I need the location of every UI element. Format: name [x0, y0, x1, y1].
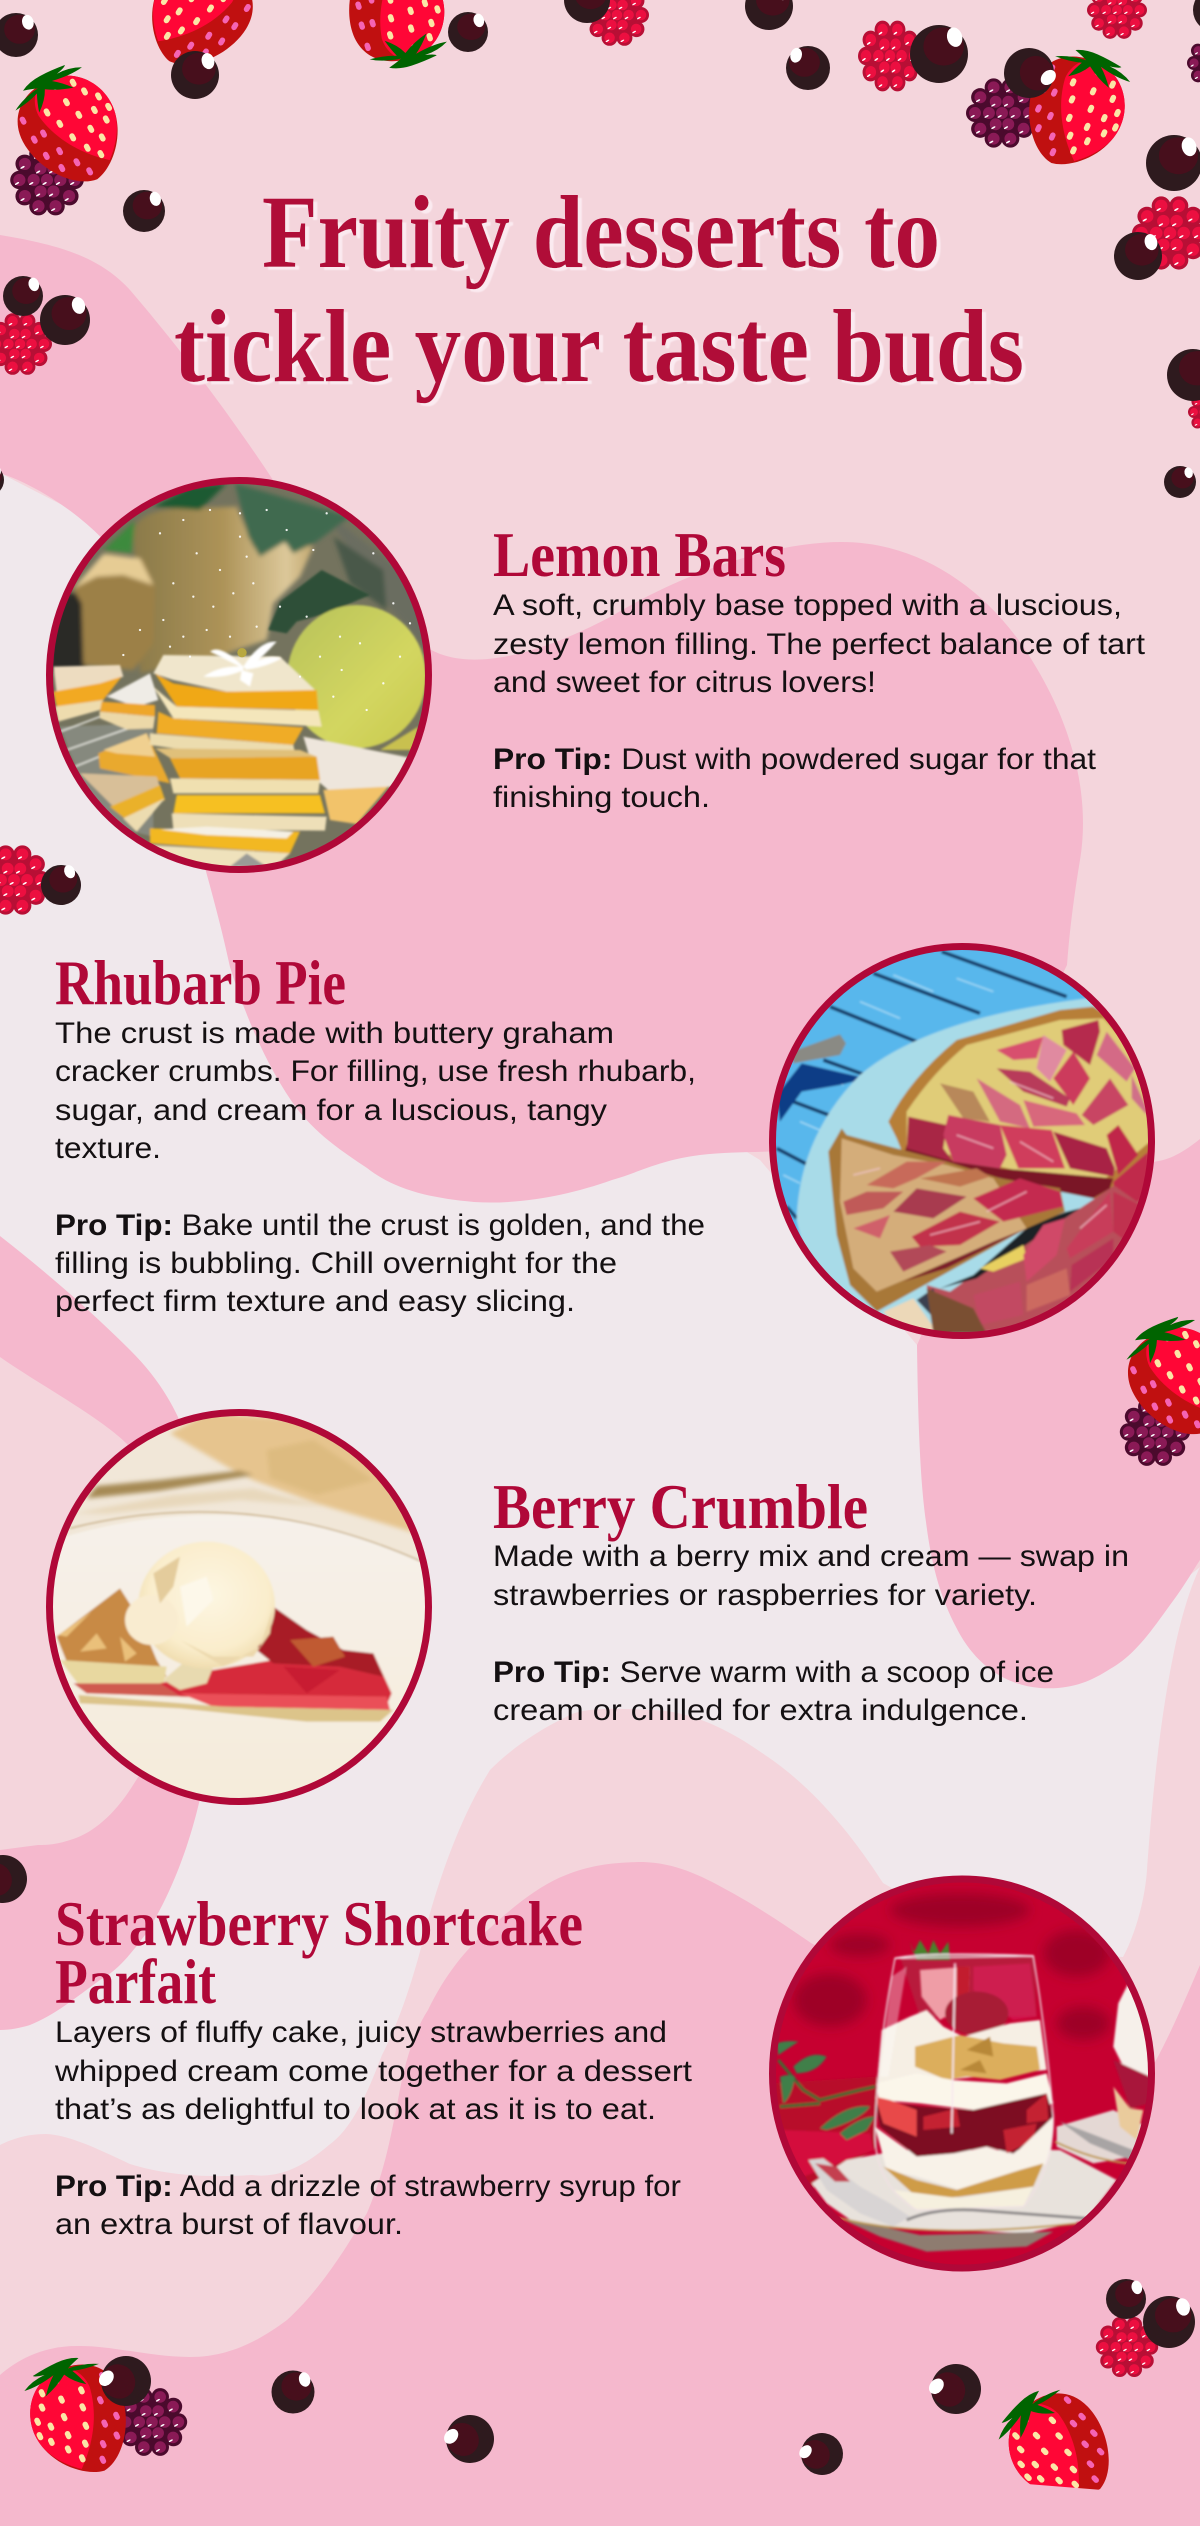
text block: berry crumble description: Pro Tip: Serve warm with a scoop of ice	[493, 1656, 1054, 1689]
text block: lemon bars description: zesty lemon filling. The perfect balance of tart	[493, 628, 1146, 661]
text block: parfait description: an extra burst of flavour.	[55, 2208, 403, 2241]
text block: lemon bars description: and sweet for citrus lovers!	[493, 666, 876, 699]
title: Fruity desserts to	[262, 175, 940, 290]
heading: Rhubarb Pie: Rhubarb Pie	[55, 948, 346, 1018]
panel: berry crumble	[40, 1400, 1129, 1810]
text block: rhubarb pie description: Pro Tip: Bake until the crust is golden, and the	[55, 1209, 705, 1242]
icon: raspberry and cherries bottom right	[1096, 2279, 1195, 2377]
photo: lemon bars	[40, 470, 440, 880]
icon: raspberry and cherries left	[0, 276, 90, 496]
text block: parfait description: that’s as delightful to look at as it is to eat.	[55, 2093, 656, 2126]
text block: parfait description: Layers of fluffy cake, juicy strawberries and	[55, 2016, 667, 2049]
text block: lemon bars description: finishing touch.	[493, 781, 710, 814]
icon: strawberry and cherry top centre	[331, 0, 488, 80]
heading: Strawberry Shortcake Parfait: Strawberry Shortcake	[55, 1889, 583, 1959]
text block: rhubarb pie description: texture.	[55, 1132, 161, 1165]
icon: cherry left edge	[0, 1846, 36, 1912]
panel: rhubarb pie	[55, 935, 1160, 1345]
title	[174, 175, 1024, 404]
text block: berry crumble description: Made with a berry mix and cream — swap in	[493, 1540, 1129, 1573]
photo: parfait	[760, 1870, 1160, 2280]
text block: parfait description: whipped cream come together for a dessert	[54, 2055, 693, 2088]
photo: berry crumble	[40, 1400, 440, 1810]
text block: rhubarb pie description: sugar, and cream for a luscious, tangy	[55, 1094, 607, 1127]
text block: lemon bars description	[493, 589, 1146, 814]
heading: Lemon Bars: Lemon Bars	[493, 520, 786, 590]
text block: parfait description: Pro Tip: Add a drizzle of strawberry syrup for	[55, 2170, 681, 2203]
panel: strawberry shortcake parfait	[54, 1870, 1160, 2280]
icon: strawberry and blackberry right	[1111, 1305, 1200, 1466]
text block: rhubarb pie description: perfect firm texture and easy slicing.	[55, 1285, 575, 1318]
heading: Strawberry Shortcake Parfait	[55, 1889, 583, 2017]
icon: raspberry and cherry top right	[858, 21, 968, 91]
icon: cherries top centre	[745, 0, 830, 90]
icon: strawberry bottom right	[984, 2370, 1135, 2522]
text block: rhubarb pie description: cracker crumbs. For filling, use fresh rhubarb,	[55, 1055, 696, 1088]
icon: fruit cluster bottom left	[11, 2343, 187, 2491]
background wave: bottom pink	[0, 1862, 1200, 2526]
photo: rhubarb pie	[760, 935, 1160, 1345]
heading: Berry Crumble: Berry Crumble	[493, 1472, 868, 1542]
text block: parfait description	[54, 2016, 693, 2241]
background wave: upper pink blob	[0, 235, 1083, 1203]
icon: strawberry and cherry top	[128, 0, 273, 99]
icon: fruit cluster top right	[966, 0, 1200, 183]
icon: fruit cluster right edge	[1114, 135, 1200, 498]
icon: scattered cherries bottom	[272, 2354, 991, 2483]
title: tickle your taste buds	[174, 289, 1024, 404]
text block: berry crumble description: cream or chilled for extra indulgence.	[493, 1694, 1028, 1727]
heading: Strawberry Shortcake Parfait: Parfait	[55, 1947, 216, 2017]
text block: berry crumble description	[493, 1540, 1129, 1727]
text block: rhubarb pie description: filling is bubbling. Chill overnight for the	[55, 1247, 617, 1280]
icon: raspberry and cherry top	[564, 0, 649, 46]
text block: lemon bars description: Pro Tip: Dust with powdered sugar for that	[493, 743, 1097, 776]
background wave: left light inset	[0, 1357, 250, 1850]
text block: rhubarb pie description	[55, 1017, 705, 1318]
text block: berry crumble description: strawberries or raspberries for variety.	[493, 1579, 1037, 1612]
text block: rhubarb pie description: The crust is made with buttery graham	[55, 1017, 614, 1050]
background wave: right pink blob	[917, 1139, 1200, 1688]
panel: lemon bars	[40, 470, 1146, 880]
text block: lemon bars description: A soft, crumbly base topped with a luscious,	[493, 589, 1122, 622]
background wave: left pink blob	[0, 1236, 250, 2030]
background wave: pale grey region	[0, 473, 1200, 2176]
icon: raspberry and cherry left middle	[0, 845, 84, 915]
icon: fruit cluster top left	[0, 13, 165, 232]
